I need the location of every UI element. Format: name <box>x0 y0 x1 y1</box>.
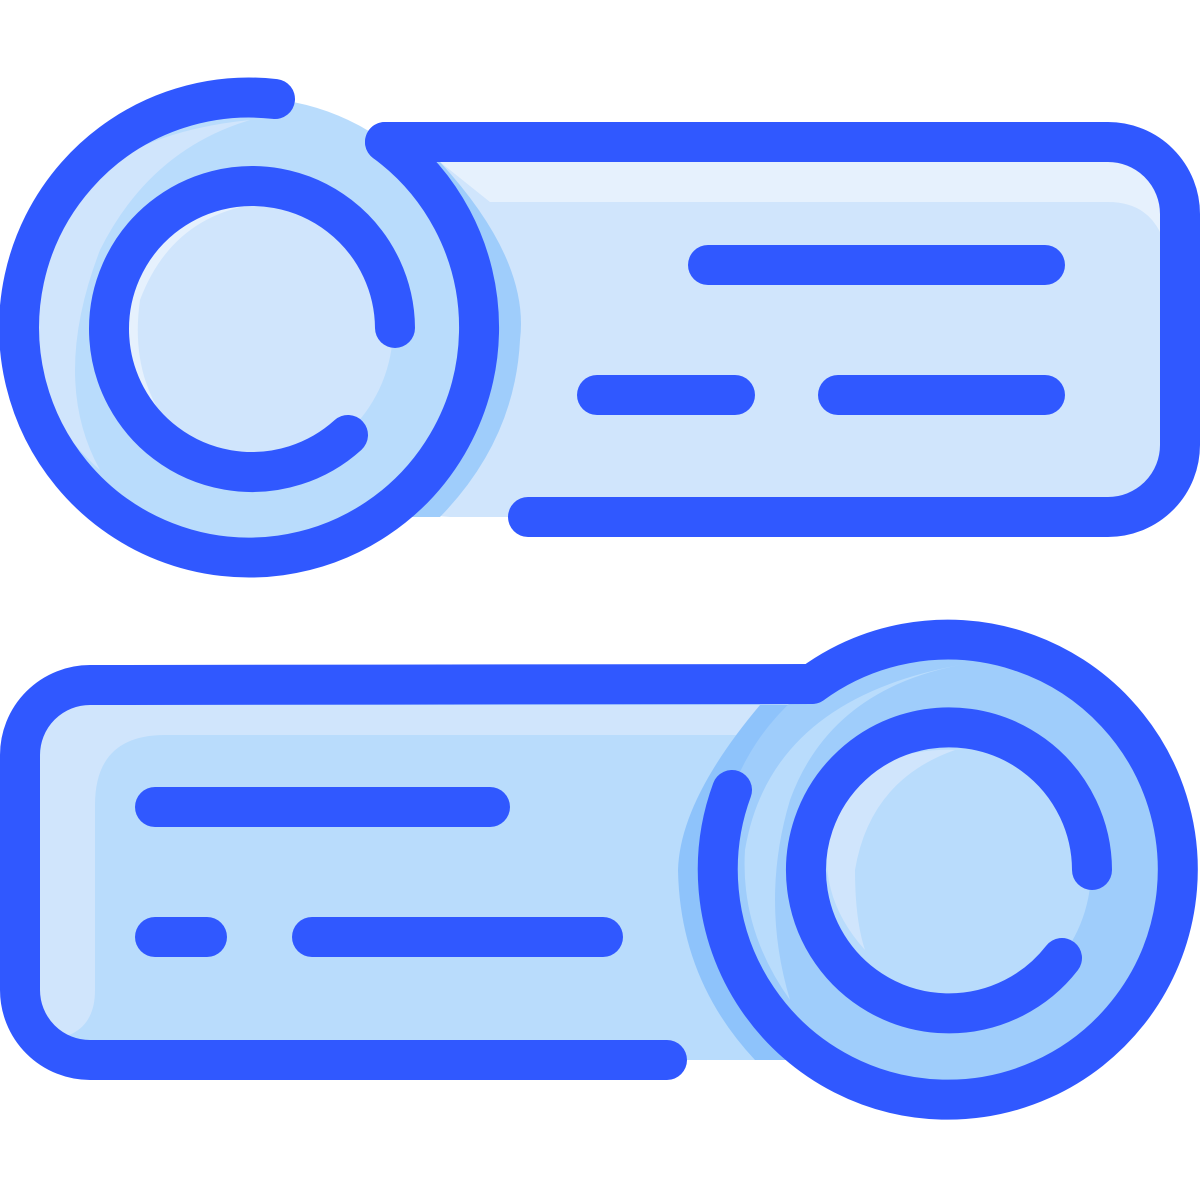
top toggle <box>19 98 1180 558</box>
top knob fill <box>20 98 480 558</box>
top bar fill <box>380 142 1180 517</box>
bottom toggle <box>20 640 1178 1100</box>
bottom bar fill <box>20 685 840 1060</box>
top strokes <box>19 98 1180 558</box>
bottom strokes <box>20 640 1178 1100</box>
bottom knob fill <box>718 640 1178 1100</box>
